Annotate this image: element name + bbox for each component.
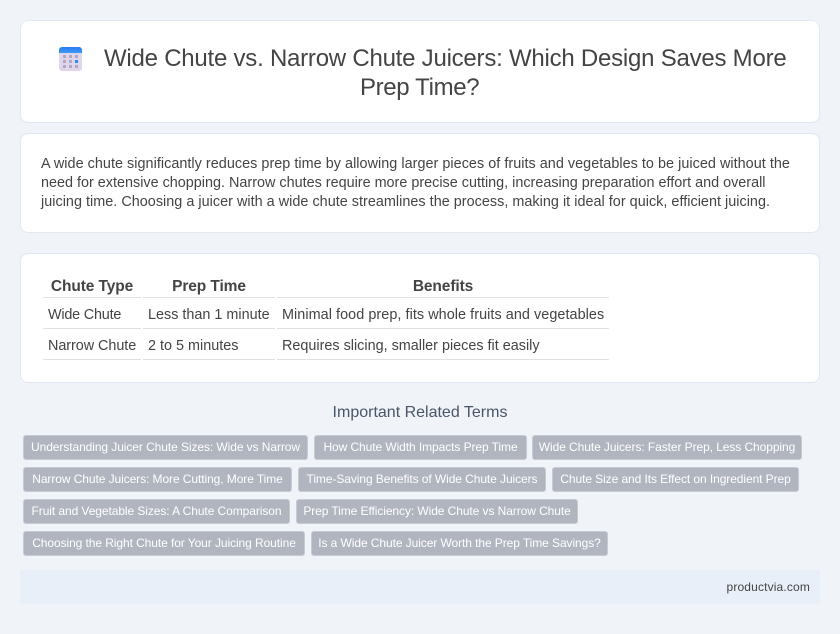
row: wide chute: Wide Chute xyxy=(48,307,121,323)
panel: summary card xyxy=(20,133,820,233)
row: narrow chute: Narrow Chute xyxy=(48,338,136,354)
tag row 2: Time-Saving Benefits of Wide Chute Juicers xyxy=(307,472,537,486)
row: wide chute xyxy=(48,307,604,323)
summary text xyxy=(40,156,790,210)
tag row 1: How Chute Width Impacts Prep Time xyxy=(323,440,518,454)
footer xyxy=(20,570,820,604)
title: Wide Chute vs. Narrow Chute Juicers: Which Design Saves More xyxy=(104,45,786,72)
summary text: A wide chute significantly reduces prep time by allowing larger pieces of fruits and vegetables to be juiced without the xyxy=(41,156,790,172)
table header xyxy=(51,278,473,295)
row: wide chute: Minimal food prep, fits whole fruits and vegetables xyxy=(282,307,604,323)
tags: related terms xyxy=(23,435,802,556)
title: Prep Time? xyxy=(360,74,479,101)
tag row 2 xyxy=(23,467,799,492)
tag row 1: Wide Chute Juicers: Faster Prep, Less Chopping xyxy=(539,440,795,454)
tag row 4: Choosing the Right Chute for Your Juicing Routine xyxy=(32,536,296,550)
tag row 2: Narrow Chute Juicers: More Cutting, More Time xyxy=(32,472,283,486)
row: narrow chute: Requires slicing, smaller pieces fit easily xyxy=(282,338,540,354)
row: wide chute: Less than 1 minute xyxy=(148,307,270,323)
panel: comparison table card xyxy=(20,253,820,383)
footer source: productvia.com xyxy=(727,580,810,594)
summary text: need for extensive chopping. Narrow chutes require more precise cutting, increasing preparation effort and overall xyxy=(41,175,765,191)
tag row 4: Is a Wide Chute Juicer Worth the Prep Time Savings? xyxy=(318,536,601,550)
panel: title card xyxy=(20,20,820,123)
tag row 4 xyxy=(23,531,608,556)
summary text: juicing time. Choosing a juicer with a wide chute streamlines the process, making it ideal for quick, efficient juicing. xyxy=(41,194,770,210)
tag row 1: Understanding Juicer Chute Sizes: Wide vs Narrow xyxy=(31,440,300,454)
tag row 1 xyxy=(23,435,802,460)
tag row 3: Prep Time Efficiency: Wide Chute vs Narrow Chute xyxy=(303,504,571,518)
table header: Chute Type xyxy=(51,278,133,295)
title xyxy=(104,45,786,101)
row: narrow chute xyxy=(48,338,540,354)
icon: calendar xyxy=(59,47,82,71)
comparison table xyxy=(43,278,609,360)
tag row 3 xyxy=(23,499,578,524)
table header: Prep Time xyxy=(172,278,246,295)
heading: related terms: Important Related Terms xyxy=(333,404,507,421)
row: narrow chute: 2 to 5 minutes xyxy=(148,338,238,354)
table header: Benefits xyxy=(413,278,473,295)
tag row 2: Chute Size and Its Effect on Ingredient Prep xyxy=(560,472,791,486)
tag row 3: Fruit and Vegetable Sizes: A Chute Comparison xyxy=(32,504,281,518)
